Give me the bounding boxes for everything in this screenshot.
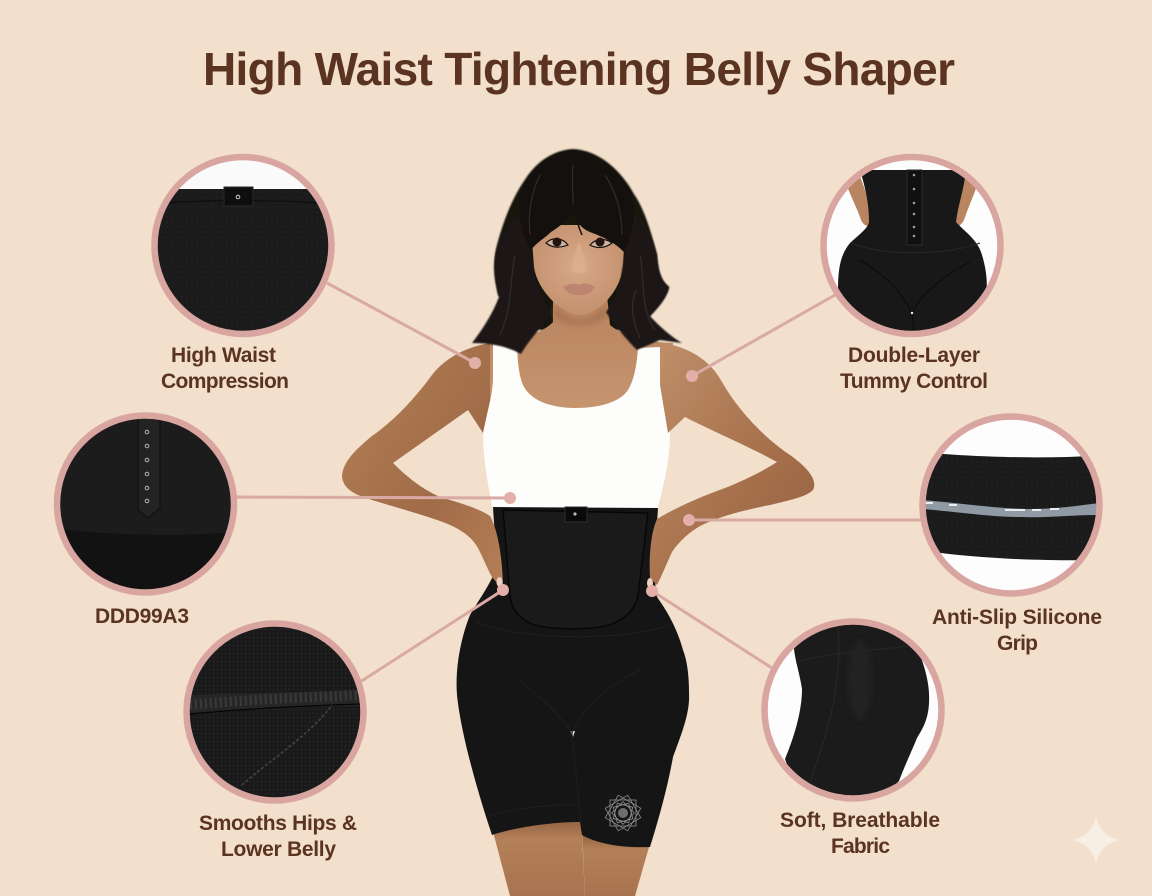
label: anti-slip silicone grip	[932, 606, 1102, 655]
title: High Waist Tightening Belly Shaper	[203, 43, 955, 95]
circle: double-layer tummy control	[820, 150, 1010, 340]
model figure	[342, 149, 814, 896]
nose	[572, 242, 586, 273]
face	[531, 225, 625, 315]
shorts seams	[476, 622, 670, 822]
icon: sparkle	[1072, 816, 1120, 864]
label: double-layer tummy control	[840, 344, 988, 393]
label: soft breathable fabric: Soft, Breathable	[780, 809, 940, 832]
neck shadow	[554, 305, 606, 325]
shorts	[457, 565, 689, 847]
label: anti-slip silicone grip: Anti-Slip Silicone	[932, 606, 1102, 629]
crotch gap	[570, 731, 575, 737]
label: double-layer tummy control: Double-Layer	[848, 344, 980, 367]
label: product code: DDD99A3	[95, 605, 189, 628]
hair side right	[606, 213, 682, 350]
hair bangs	[519, 150, 634, 252]
circle: soft breathable fabric	[760, 620, 950, 810]
waist belt	[493, 507, 658, 585]
mandala logo	[605, 795, 641, 831]
label: double-layer tummy control: Tummy Control	[840, 370, 988, 393]
belt clasp	[565, 507, 587, 522]
circle: product code detail	[50, 410, 240, 600]
circle: smooths hips and lower belly	[180, 620, 370, 810]
label: smooths hips and lower belly: Lower Belly	[221, 838, 336, 861]
left arm and hand	[342, 343, 503, 590]
label: anti-slip silicone grip: Grip	[997, 632, 1038, 655]
callout dots	[469, 357, 698, 597]
hair side left	[472, 212, 552, 354]
finger nails	[496, 577, 653, 588]
label: soft breathable fabric: Fabric	[831, 835, 890, 858]
circle: anti-slip silicone grip	[920, 414, 1110, 604]
neck and chest skin	[485, 295, 673, 430]
eyes	[546, 238, 612, 247]
tummy flap	[503, 510, 648, 629]
left leg	[492, 815, 585, 896]
label: soft breathable fabric	[780, 809, 940, 858]
lips	[563, 284, 595, 295]
hair strands	[500, 165, 655, 338]
circle: high waist compression	[150, 150, 340, 340]
right arm and hand	[650, 343, 814, 585]
callout lines	[236, 283, 921, 682]
right leg	[582, 830, 651, 896]
label: high waist compression: Compression	[161, 370, 289, 393]
fringe strand	[575, 208, 582, 235]
tank top	[483, 338, 670, 510]
label: smooths hips and lower belly: Smooths Hips &	[199, 812, 357, 835]
label: smooths hips and lower belly	[199, 812, 357, 861]
hair back	[495, 149, 669, 330]
label: high waist compression: High Waist	[171, 344, 276, 367]
label: high waist compression	[161, 344, 289, 393]
